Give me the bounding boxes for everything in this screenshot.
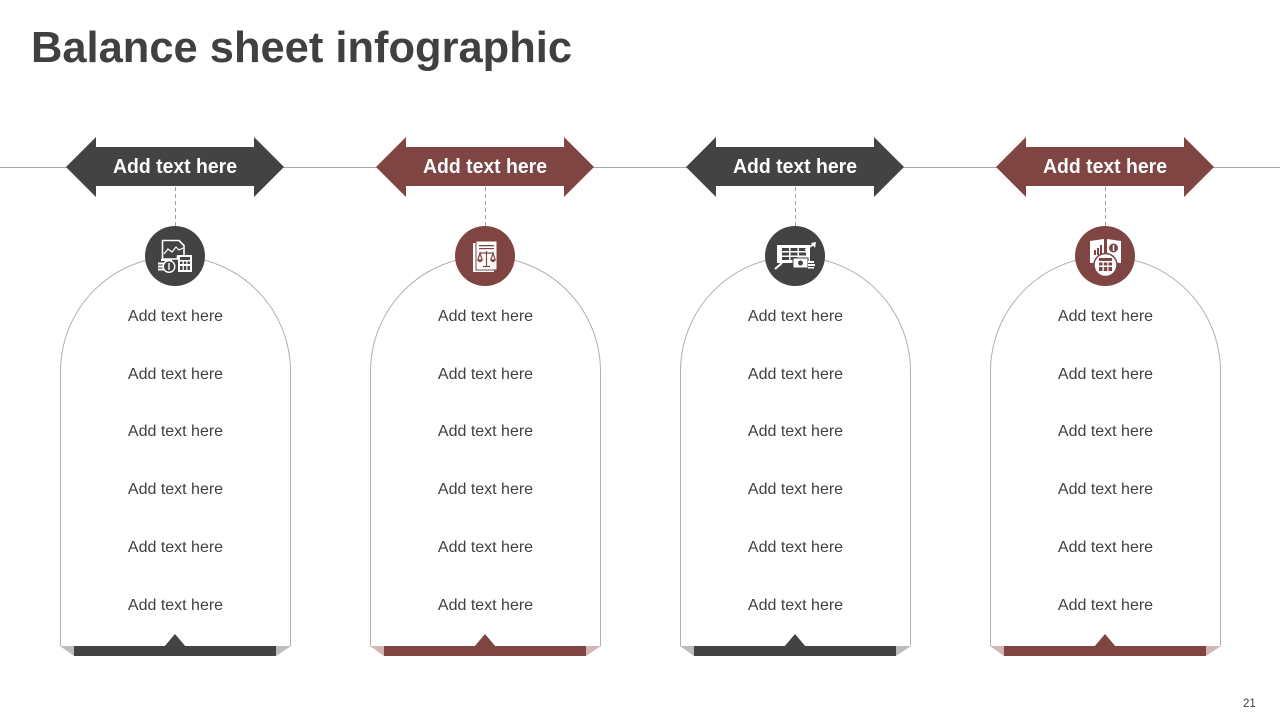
card base 1 (60, 634, 291, 656)
text rows 1 (128, 308, 223, 614)
arch card 1 (60, 257, 290, 646)
arch card 4 (990, 256, 1220, 646)
text rows 2 (438, 308, 533, 614)
text rows 3: Add text here (748, 539, 843, 556)
text rows 3 (748, 308, 843, 614)
text rows 4: Add text here (1058, 308, 1153, 325)
text rows 4: Add text here (1058, 597, 1153, 614)
text rows 3: Add text here (748, 366, 843, 383)
text rows 1: Add text here (128, 597, 223, 614)
text rows 3: Add text here (748, 423, 843, 440)
text rows 3: Add text here (748, 481, 843, 498)
panel: column 4 (990, 137, 1221, 656)
icon: board with chart and banknote (765, 226, 825, 286)
double arrow header 4: Add text here (1043, 156, 1167, 178)
double arrow header 1: Add text here (113, 156, 237, 178)
double arrow header 3 (686, 137, 904, 197)
text rows 4: Add text here (1058, 366, 1153, 383)
text rows 4: Add text here (1058, 481, 1153, 498)
card base 2 (370, 634, 601, 656)
page number: 21 (1243, 698, 1256, 710)
text rows 4 (1058, 308, 1153, 614)
text rows 2: Add text here (438, 423, 533, 440)
arch card 2 (370, 257, 600, 646)
title: Balance sheet infographic (31, 23, 572, 72)
text rows 2: Add text here (438, 481, 533, 498)
card base 4 (990, 634, 1221, 656)
text rows 3: Add text here (748, 597, 843, 614)
text rows 1: Add text here (128, 308, 223, 325)
text rows 3: Add text here (748, 308, 843, 325)
panel: column 2 (370, 137, 601, 656)
text rows 1: Add text here (128, 366, 223, 383)
text rows 2: Add text here (438, 597, 533, 614)
card base 3 (680, 634, 911, 656)
text rows 2: Add text here (438, 366, 533, 383)
double arrow header 4 (996, 137, 1214, 197)
double arrow header 1 (66, 137, 284, 197)
text rows 1: Add text here (128, 539, 223, 556)
text rows 2: Add text here (438, 539, 533, 556)
text rows 2: Add text here (438, 308, 533, 325)
icon: financial report with calculator (145, 226, 205, 286)
text rows 1: Add text here (128, 423, 223, 440)
double arrow header 2 (376, 137, 594, 197)
icon: open book with calculator (1075, 226, 1135, 286)
text rows 1: Add text here (128, 481, 223, 498)
icon: legal document with scales (455, 226, 515, 286)
panel: column 3 (680, 137, 911, 656)
panel: column 1 (60, 137, 291, 656)
arch card 3 (680, 256, 910, 646)
text rows 4: Add text here (1058, 423, 1153, 440)
double arrow header 2: Add text here (423, 156, 547, 178)
double arrow header 3: Add text here (733, 156, 857, 178)
text rows 4: Add text here (1058, 539, 1153, 556)
